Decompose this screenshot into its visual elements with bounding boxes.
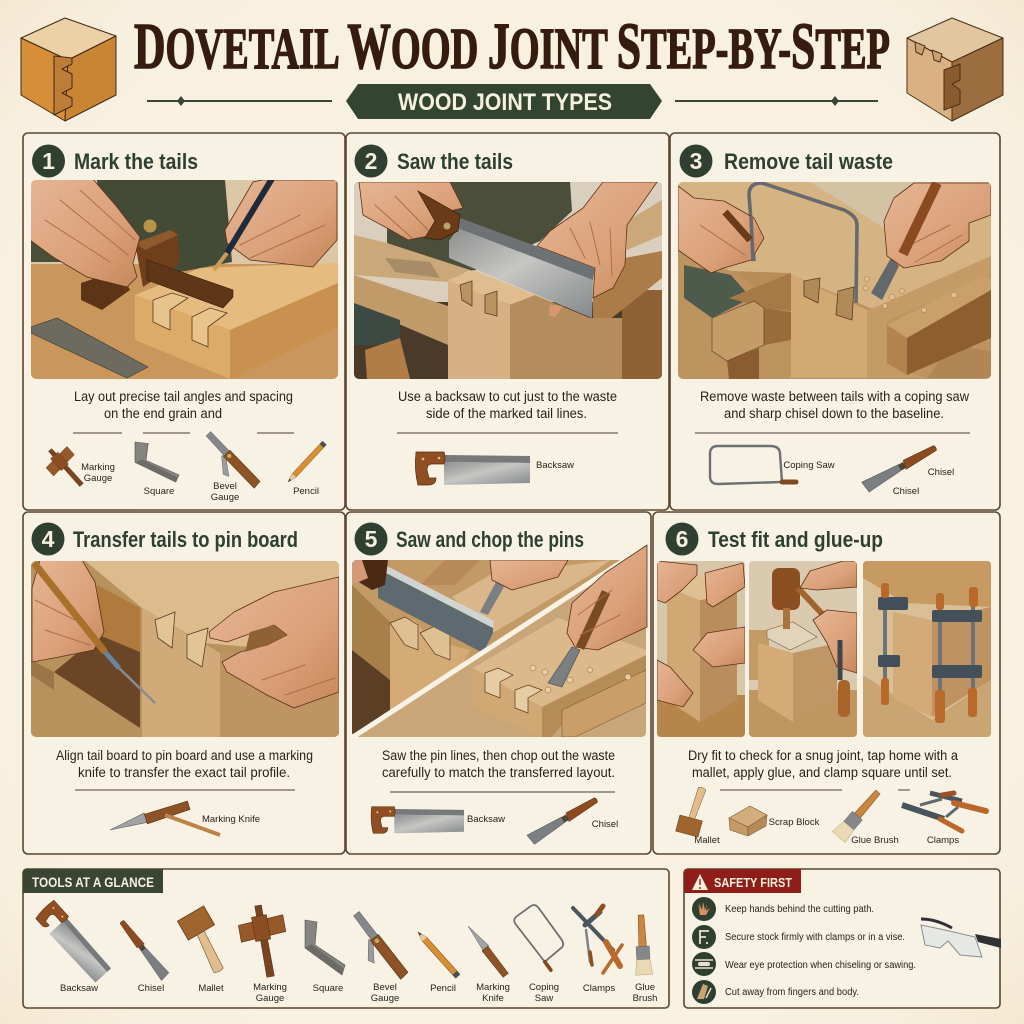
- tool labels: Saw: [535, 993, 553, 1004]
- illustration: clamp square: [863, 561, 991, 737]
- icon: hands: [692, 897, 716, 921]
- tool: marking knife: [108, 800, 220, 835]
- step 2 description: Use a backsaw to cut just to the waste: [398, 389, 617, 404]
- tool: chisel: [862, 443, 939, 493]
- step 3 number: 3: [690, 148, 702, 174]
- step 2 description: [398, 389, 617, 421]
- step 6 number: [666, 522, 698, 556]
- banner: wood joint types: WOOD JOINT TYPES: [398, 89, 612, 116]
- tool labels: Gauge: [371, 993, 399, 1004]
- step 2 illustration: [354, 182, 662, 379]
- step 5 description: [382, 748, 615, 780]
- illustration: dry fit: [657, 561, 745, 737]
- tool labels: [60, 982, 657, 1004]
- tool labels: Glue: [635, 982, 655, 993]
- panel: step 2 saw the tails: [346, 133, 669, 510]
- step 5 description: Saw the pin lines, then chop out the waste: [382, 748, 615, 763]
- step 1 heading: Mark the tails: [74, 149, 198, 174]
- step 4 description: Align tail board to pin board and use a marking: [56, 748, 313, 763]
- icon: safety goggles: [921, 919, 1001, 957]
- label: bevel gauge: Bevel: [213, 481, 237, 492]
- tool labels: Marking: [476, 982, 510, 993]
- step 1 description: [74, 389, 293, 421]
- tool: marking gauge: [39, 440, 93, 495]
- tool: pencil: [416, 930, 460, 978]
- tool: mallet: [674, 784, 714, 839]
- tool: pencil: [286, 441, 327, 484]
- label: glue brush: Glue Brush: [851, 835, 899, 846]
- illustration: tap home: [749, 561, 857, 737]
- tool: chisel: [118, 918, 170, 981]
- tool: coping saw: [512, 903, 572, 971]
- tool: mallet: [176, 905, 233, 978]
- panel: step 4 transfer tails to pin board: [23, 512, 345, 854]
- label: scrap block: Scrap Block: [769, 817, 820, 828]
- safety text: eye protection: Wear eye protection when chiseling or sawing.: [725, 960, 916, 971]
- tool: coping saw: [710, 446, 796, 484]
- step 5 illustration: [352, 545, 647, 737]
- tool: backsaw: [371, 807, 464, 833]
- step 3 heading: Remove tail waste: [724, 149, 893, 174]
- label: square: Square: [144, 486, 174, 497]
- icon: right dovetail block: [907, 18, 1003, 121]
- icon: clamp: [692, 925, 716, 949]
- step 6 description: [688, 748, 958, 780]
- tools header: [23, 869, 163, 893]
- label: pencil: Pencil: [293, 486, 319, 497]
- icon: cut away: [692, 980, 716, 1004]
- safety text: clamp: Secure stock firmly with clamps or in a vise.: [725, 932, 905, 943]
- step 6 number: 6: [676, 526, 688, 552]
- label: chisel: Chisel: [592, 819, 618, 830]
- step 1 illustration: [30, 177, 338, 379]
- safety header: [684, 869, 801, 893]
- step 1 number: [32, 144, 65, 178]
- tool: scrap block: [729, 806, 767, 836]
- label: mallet: Mallet: [694, 835, 720, 846]
- label: bevel gauge: Gauge: [211, 492, 239, 503]
- tool labels: Bevel: [373, 982, 397, 993]
- banner: wood joint types: [147, 84, 878, 119]
- step 1 number: 1: [42, 148, 55, 174]
- safety text: cut away: Cut away from fingers and body.: [725, 987, 859, 998]
- tool: clamps: [573, 906, 622, 973]
- tool labels: Knife: [482, 993, 504, 1004]
- step 6 description: Dry fit to check for a snug joint, tap home with a: [688, 748, 958, 763]
- label: clamps: Clamps: [927, 835, 959, 846]
- step 4 number: [32, 522, 64, 556]
- panel: tools at a glance: [23, 869, 669, 1008]
- tool labels: Brush: [633, 993, 657, 1004]
- title: DOVETAIL WOOD JOINT STEP-BY-STEP: [134, 10, 890, 83]
- tool: backsaw: [34, 900, 113, 984]
- label: marking knife: Marking Knife: [202, 814, 260, 825]
- step 6 description: mallet, apply glue, and clamp square until set.: [692, 765, 952, 780]
- panel: step 1 mark the tails: [23, 133, 345, 510]
- step 2 description: side of the marked tail lines.: [426, 406, 587, 421]
- step 5 description: carefully to match the transferred layout.: [382, 765, 615, 780]
- tool labels: Gauge: [256, 993, 284, 1004]
- label: chisel below: Chisel: [893, 486, 919, 497]
- step 4 heading: Transfer tails to pin board: [73, 527, 298, 552]
- step 3 description: Remove waste between tails with a coping saw: [700, 389, 969, 404]
- tool labels: Clamps: [583, 983, 615, 994]
- tool: chisel: [527, 795, 600, 845]
- safety text: hands: Keep hands behind the cutting path.: [725, 904, 874, 915]
- label: marking gauge: [81, 462, 115, 484]
- panel: step 5 saw and chop the pins: [346, 512, 651, 854]
- step 4 description: [56, 748, 313, 780]
- tool labels: Square: [313, 983, 343, 994]
- step 3 description: [700, 389, 969, 421]
- label: backsaw: Backsaw: [467, 814, 505, 825]
- tool: marking gauge: [236, 902, 293, 981]
- label: backsaw: Backsaw: [536, 460, 574, 471]
- icon: eye protection: [692, 952, 716, 976]
- tool: marking knife: [465, 923, 509, 978]
- safety header: SAFETY FIRST: [714, 875, 792, 890]
- tool labels: Coping: [529, 982, 559, 993]
- step 3 illustration: [678, 182, 991, 379]
- label: coping saw: Coping Saw: [783, 460, 835, 471]
- tool: glue brush: [632, 915, 653, 975]
- tool: backsaw: [415, 452, 530, 485]
- step 6 heading: Test fit and glue-up: [708, 527, 883, 552]
- tool: square: [305, 920, 345, 975]
- panel: step 3 remove tail waste: [670, 133, 1000, 510]
- tool labels: Chisel: [138, 983, 164, 994]
- tool: bevel gauge: [196, 431, 261, 497]
- tool: bevel gauge: [341, 911, 409, 988]
- tool labels: Backsaw: [60, 983, 98, 994]
- icon: left dovetail block: [21, 18, 116, 121]
- panel: step 6 test fit and glue-up: [653, 512, 1000, 854]
- label: marking gauge: Marking: [81, 462, 115, 473]
- tools header: TOOLS AT A GLANCE: [32, 875, 154, 890]
- tool: glue brush: [832, 786, 884, 843]
- panel: safety first: [684, 869, 1001, 1008]
- label: chisel right: Chisel: [928, 467, 954, 478]
- step 5 heading: Saw and chop the pins: [396, 527, 584, 552]
- tool: clamps: [902, 793, 986, 831]
- label: bevel gauge: [211, 481, 239, 503]
- step 2 number: 2: [365, 148, 377, 174]
- label: marking gauge: Gauge: [84, 473, 112, 484]
- step 2 heading: Saw the tails: [397, 149, 513, 174]
- step 5 number: 5: [365, 526, 378, 552]
- step 2 number: [354, 144, 388, 178]
- tool labels: Mallet: [198, 983, 224, 994]
- step 1 description: Lay out precise tail angles and spacing: [74, 389, 293, 404]
- step 3 description: and sharp chisel down to the baseline.: [724, 406, 944, 421]
- tool labels: Pencil: [430, 983, 456, 994]
- tool: square: [135, 442, 179, 482]
- step 4 number: 4: [42, 526, 55, 552]
- step 5 number: [354, 522, 388, 556]
- step 4 illustration: [31, 560, 339, 737]
- step 3 number: [680, 144, 712, 178]
- tool labels: Marking: [253, 982, 287, 993]
- step 4 description: knife to transfer the exact tail profile.: [78, 765, 290, 780]
- step 1 description: on the end grain and: [104, 406, 222, 421]
